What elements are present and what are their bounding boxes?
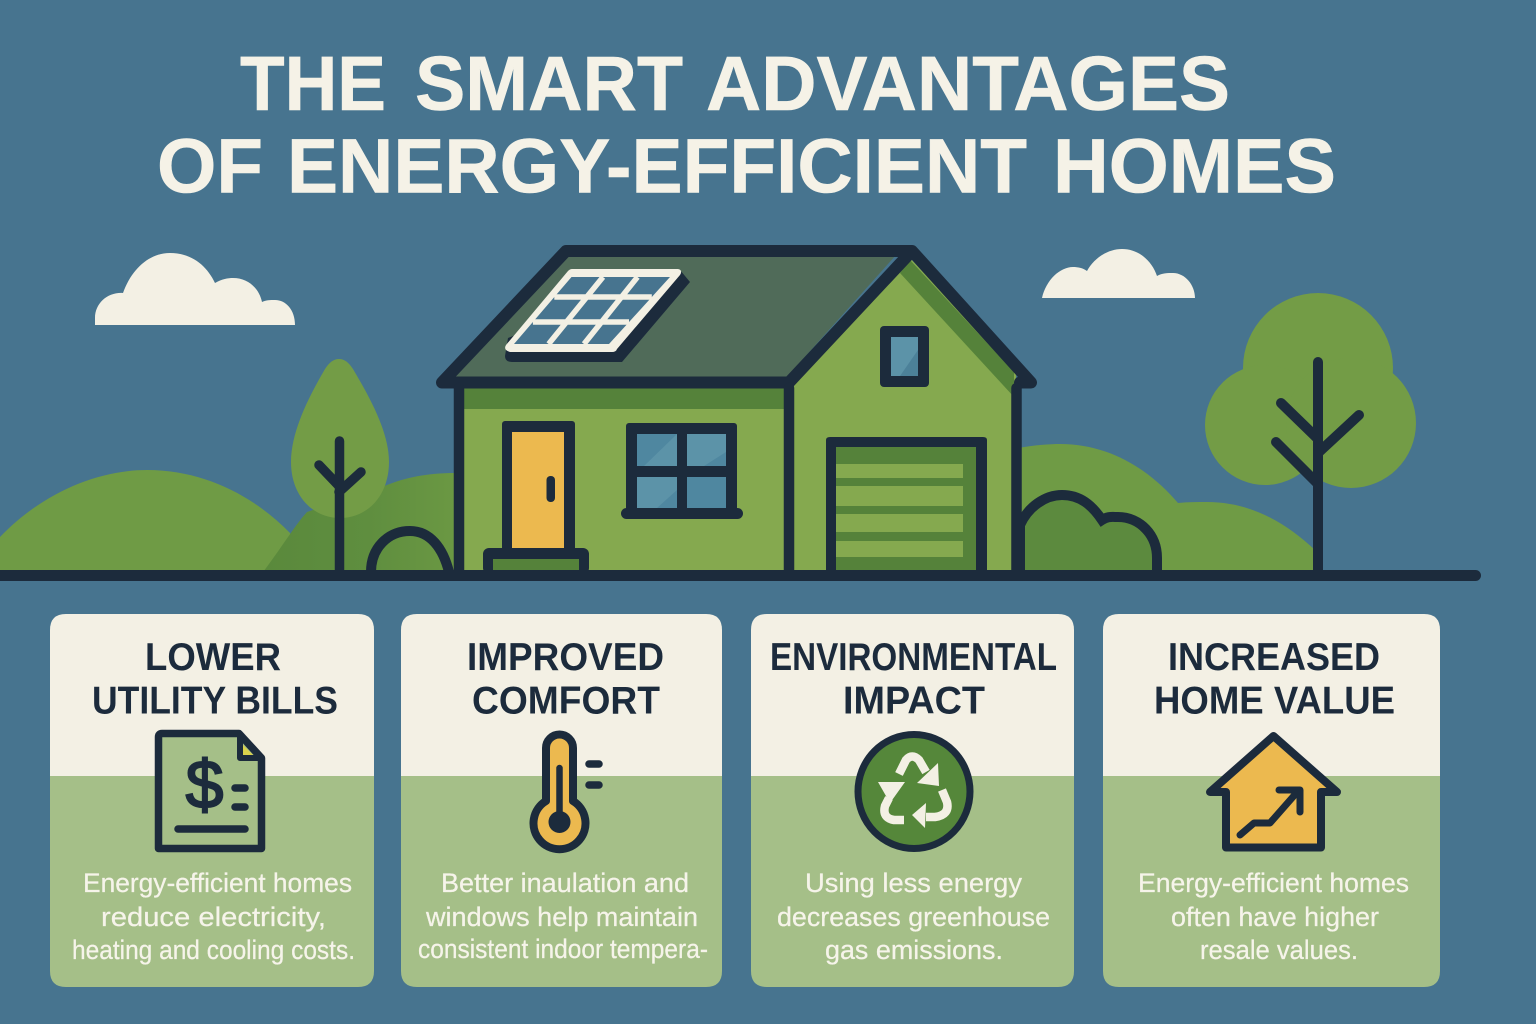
house [442, 251, 1031, 574]
front window [621, 423, 743, 519]
body text: heating and cooling costs. [72, 935, 355, 965]
body text: gas emissions. [825, 935, 1003, 965]
card background [751, 614, 1074, 987]
heading: IMPROVED [467, 636, 664, 679]
heading [1154, 636, 1395, 722]
body text: Energy-efficient homes [83, 868, 352, 898]
icon: house with rising arrow [1210, 736, 1337, 848]
hills left [0, 470, 456, 572]
title: ADVANTAGES [706, 41, 1230, 127]
icon: bill [158, 734, 262, 848]
door step [483, 548, 589, 574]
gable shade [900, 260, 1014, 397]
heading: COMFORT [472, 680, 660, 722]
bush right [1020, 495, 1157, 575]
body text: resale values. [1200, 935, 1358, 965]
card background [50, 614, 374, 987]
roof outline [442, 251, 1031, 382]
body text: windows help maintain [425, 902, 698, 932]
hills right [1018, 444, 1315, 572]
card: environmental impact [751, 614, 1074, 987]
title: SMART [415, 41, 683, 127]
door [502, 421, 575, 556]
card: lower utility bills [50, 614, 374, 987]
heading [770, 636, 1057, 722]
card background [401, 614, 722, 987]
body text: Using less energy [805, 868, 1022, 898]
heading: INCREASED [1168, 636, 1380, 679]
icon: bill: $ [186, 747, 223, 823]
card background [1103, 614, 1440, 987]
card: improved comfort [401, 614, 722, 987]
wall shade band [462, 385, 786, 409]
heading: LOWER [145, 636, 281, 679]
heading [92, 636, 338, 722]
title: ENERGY-EFFICIENT [287, 124, 1027, 210]
heading: HOME VALUE [1154, 680, 1395, 722]
garage door [826, 437, 987, 572]
heading: UTILITY BILLS [92, 680, 338, 722]
body text: often have higher [1171, 902, 1379, 932]
cloud right [1042, 249, 1195, 298]
tree left [291, 359, 389, 572]
house wall left [460, 385, 790, 572]
gable wall [792, 258, 1016, 572]
title: OF [157, 124, 263, 210]
heading: ENVIRONMENTAL [770, 636, 1057, 679]
icon: thermometer [534, 734, 599, 849]
body text: consistent indoor tempera- [418, 934, 708, 964]
body text [418, 868, 708, 964]
heading: IMPACT [843, 680, 985, 722]
card: increased home value [1103, 614, 1440, 987]
body text: decreases greenhouse [777, 902, 1050, 932]
body text [777, 868, 1050, 965]
body text [72, 868, 355, 965]
body text [1138, 868, 1409, 965]
gable window [880, 326, 929, 387]
title: THE [240, 41, 386, 127]
roof [452, 255, 896, 378]
title [157, 41, 1336, 210]
heading [467, 636, 664, 722]
ground line [0, 570, 1481, 581]
tree right [1205, 293, 1416, 572]
body text: Energy-efficient homes [1138, 868, 1409, 898]
icon: recycle [858, 734, 970, 848]
title: HOMES [1053, 124, 1336, 210]
solar panel shadow [505, 270, 690, 362]
body text: reduce electricity, [101, 902, 326, 932]
solar panel [505, 269, 681, 352]
cloud left [95, 253, 295, 325]
body text: Better inaulation and [441, 868, 689, 898]
bush left [371, 531, 449, 572]
house walls outline [459, 388, 1016, 572]
